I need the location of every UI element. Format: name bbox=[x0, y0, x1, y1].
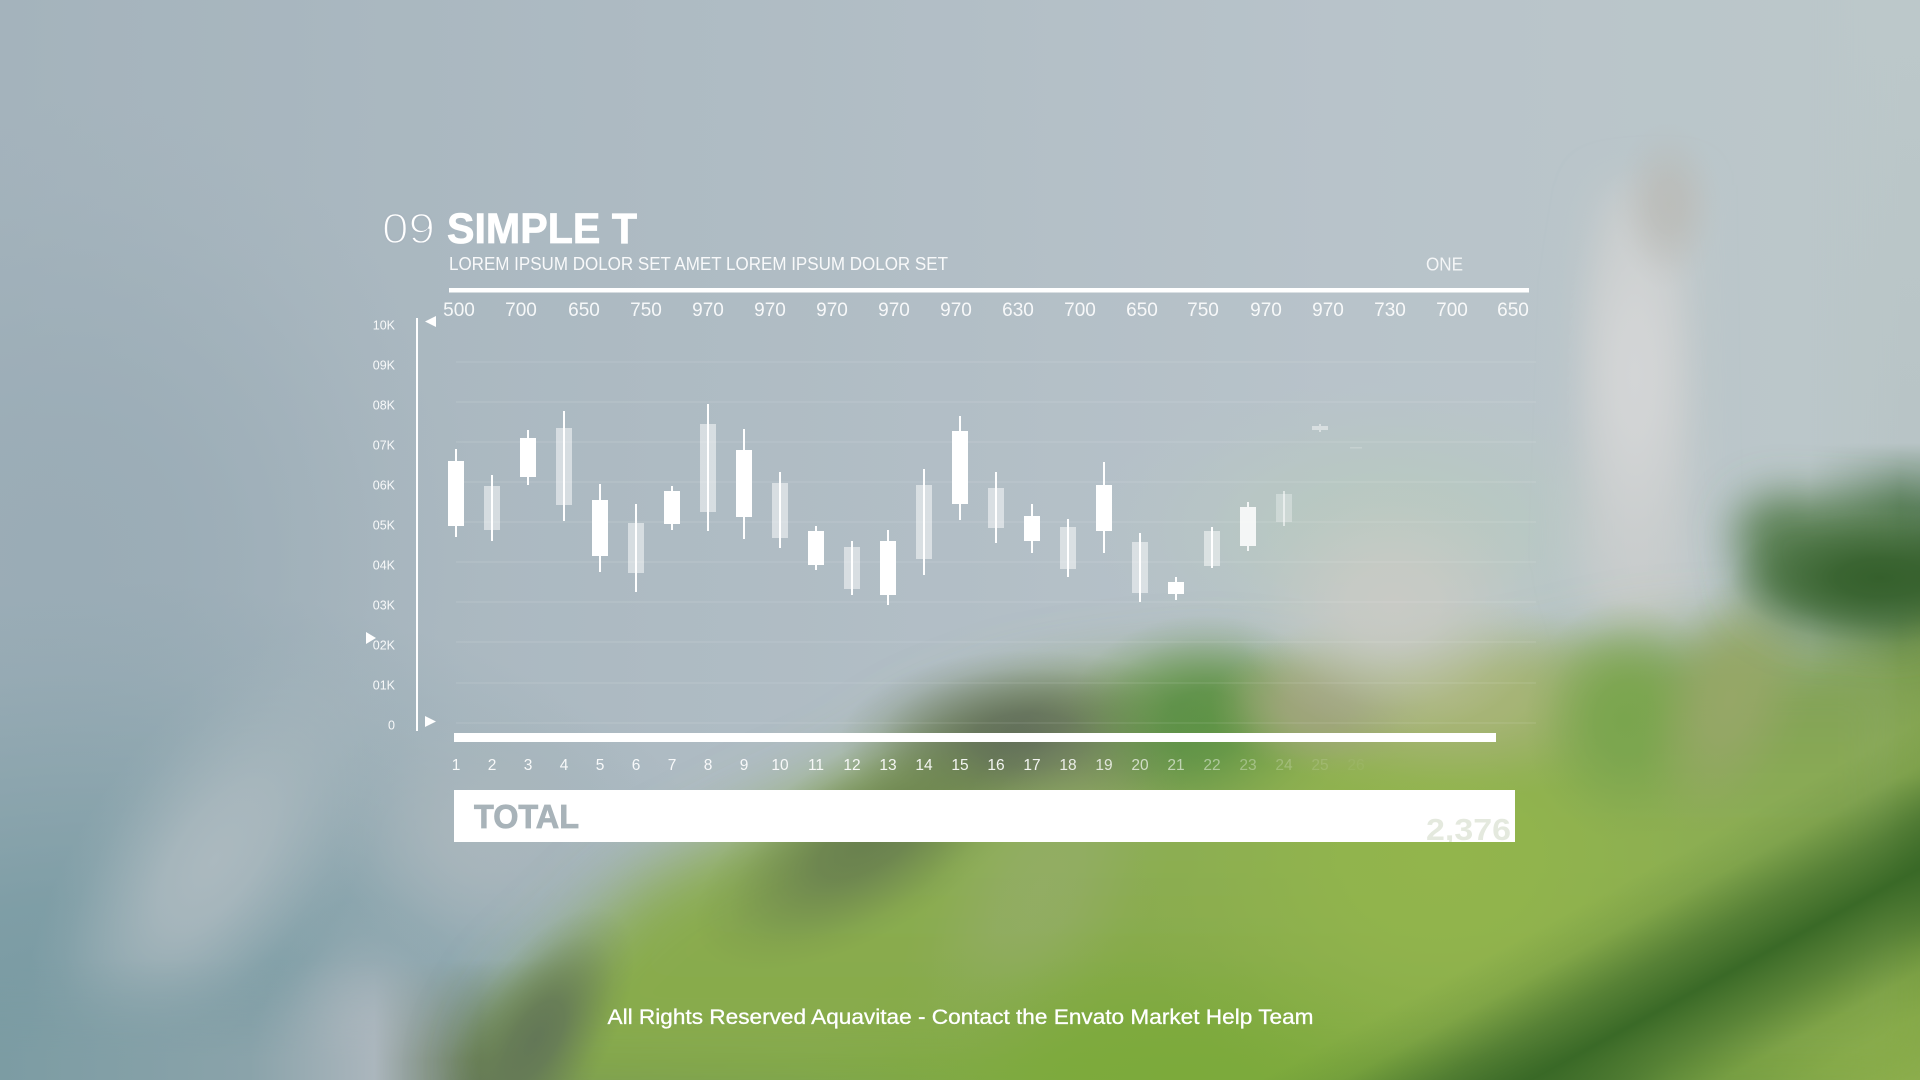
gridlines bbox=[456, 361, 1536, 724]
top value labels: 700 bbox=[505, 300, 537, 321]
x axis numbers: 3 bbox=[524, 757, 532, 774]
candle 24 bbox=[1276, 491, 1292, 526]
x axis numbers: 17 bbox=[1023, 757, 1041, 774]
x axis numbers: 21 bbox=[1167, 757, 1185, 774]
arrow: bottom axis marker bbox=[425, 716, 436, 727]
y axis labels: 0 bbox=[388, 718, 395, 732]
y axis labels: 01K bbox=[373, 678, 396, 692]
top value labels: 650 bbox=[1126, 300, 1158, 321]
x axis numbers: 26 bbox=[1347, 757, 1365, 774]
y axis labels: 03K bbox=[373, 598, 396, 612]
arrow: left value marker bbox=[366, 632, 376, 644]
candle 10 bbox=[772, 472, 788, 548]
x axis numbers: 23 bbox=[1239, 757, 1257, 774]
candle 21 bbox=[1168, 577, 1184, 600]
x axis numbers: 13 bbox=[879, 757, 897, 774]
candle 26 bbox=[1350, 447, 1362, 448]
total label: TOTAL bbox=[474, 798, 579, 835]
candle 11 bbox=[808, 526, 824, 570]
x axis numbers: 11 bbox=[808, 757, 824, 774]
x axis numbers: 20 bbox=[1131, 757, 1149, 774]
candle 20 bbox=[1132, 533, 1148, 602]
top value labels: 970 bbox=[1250, 300, 1282, 321]
y axis line bbox=[416, 318, 418, 731]
candle 13 bbox=[880, 530, 896, 605]
total value: 2,376 bbox=[1426, 812, 1511, 847]
candle 12 bbox=[844, 541, 860, 595]
candle 3 bbox=[520, 430, 536, 485]
candle 7 bbox=[664, 486, 680, 530]
top value labels: 750 bbox=[630, 300, 662, 321]
y axis labels: 02K bbox=[373, 638, 396, 652]
top value labels: 970 bbox=[692, 300, 724, 321]
arrow: top axis marker bbox=[425, 316, 436, 327]
x axis numbers: 8 bbox=[704, 757, 712, 774]
footer credit: All Rights Reserved Aquavitae - Contact the Envato Market Help Team bbox=[608, 1006, 1314, 1029]
x axis numbers: 1 bbox=[452, 757, 460, 774]
y axis labels: 09K bbox=[373, 358, 396, 372]
top value labels: 970 bbox=[878, 300, 910, 321]
y axis labels: 07K bbox=[373, 438, 396, 452]
subtitle: LOREM IPSUM DOLOR SET AMET LOREM IPSUM DOLOR SET bbox=[449, 253, 948, 274]
x axis numbers: 10 bbox=[771, 757, 789, 774]
y axis labels: 08K bbox=[373, 398, 396, 412]
candle 25 bbox=[1312, 424, 1328, 432]
x axis numbers: 15 bbox=[951, 757, 969, 774]
x axis numbers: 18 bbox=[1059, 757, 1077, 774]
candle 4 bbox=[556, 411, 572, 521]
top value labels bbox=[443, 300, 1529, 321]
y axis labels: 04K bbox=[373, 558, 396, 572]
candle 16 bbox=[988, 472, 1004, 543]
candle 15 bbox=[952, 416, 968, 520]
y axis labels bbox=[373, 318, 396, 732]
x axis numbers: 24 bbox=[1275, 757, 1293, 774]
x axis numbers: 6 bbox=[632, 757, 640, 774]
x axis numbers: 5 bbox=[596, 757, 604, 774]
candle 18 bbox=[1060, 519, 1076, 577]
title: SIMPLE T: SIMPLE T bbox=[447, 205, 637, 253]
x axis numbers: 7 bbox=[668, 757, 676, 774]
title number 09: 09 bbox=[382, 205, 435, 253]
candle 23 bbox=[1240, 502, 1256, 551]
x axis numbers: 12 bbox=[843, 757, 861, 774]
top value labels: 650 bbox=[1497, 300, 1529, 321]
candle 1 bbox=[448, 449, 464, 537]
top value labels: 970 bbox=[1312, 300, 1344, 321]
candlestick chart bbox=[448, 404, 1362, 605]
series label: ONE: ONE bbox=[1426, 254, 1463, 274]
candle 2 bbox=[484, 475, 500, 541]
top value labels: 970 bbox=[940, 300, 972, 321]
x axis numbers: 19 bbox=[1095, 757, 1113, 774]
candle 22 bbox=[1204, 527, 1220, 568]
x axis numbers bbox=[452, 757, 1365, 774]
top value labels: 500 bbox=[443, 300, 475, 321]
x axis numbers: 25 bbox=[1311, 757, 1329, 774]
x axis numbers: 9 bbox=[740, 757, 748, 774]
x axis numbers: 16 bbox=[987, 757, 1005, 774]
x axis numbers: 14 bbox=[915, 757, 933, 774]
y axis labels: 10K bbox=[373, 318, 396, 332]
x axis numbers: 4 bbox=[560, 757, 569, 774]
top value labels: 700 bbox=[1436, 300, 1468, 321]
top value labels: 970 bbox=[816, 300, 848, 321]
candle 9 bbox=[736, 429, 752, 539]
top value labels: 650 bbox=[568, 300, 600, 321]
candle 6 bbox=[628, 504, 644, 592]
top value labels: 970 bbox=[754, 300, 786, 321]
top value labels: 700 bbox=[1064, 300, 1096, 321]
top value labels: 630 bbox=[1002, 300, 1034, 321]
candle 5 bbox=[592, 484, 608, 572]
candle 17 bbox=[1024, 504, 1040, 553]
top value labels: 750 bbox=[1187, 300, 1219, 321]
total panel bbox=[454, 790, 1515, 847]
top rule bbox=[449, 288, 1529, 292]
candle 8 bbox=[700, 404, 716, 531]
candle 19 bbox=[1096, 462, 1112, 553]
x axis bar bbox=[454, 733, 1496, 742]
x axis numbers: 22 bbox=[1203, 757, 1221, 774]
candle 14 bbox=[916, 469, 932, 575]
top value labels: 730 bbox=[1374, 300, 1406, 321]
y axis labels: 05K bbox=[373, 518, 396, 532]
x axis numbers: 2 bbox=[488, 757, 496, 774]
y axis labels: 06K bbox=[373, 478, 396, 492]
